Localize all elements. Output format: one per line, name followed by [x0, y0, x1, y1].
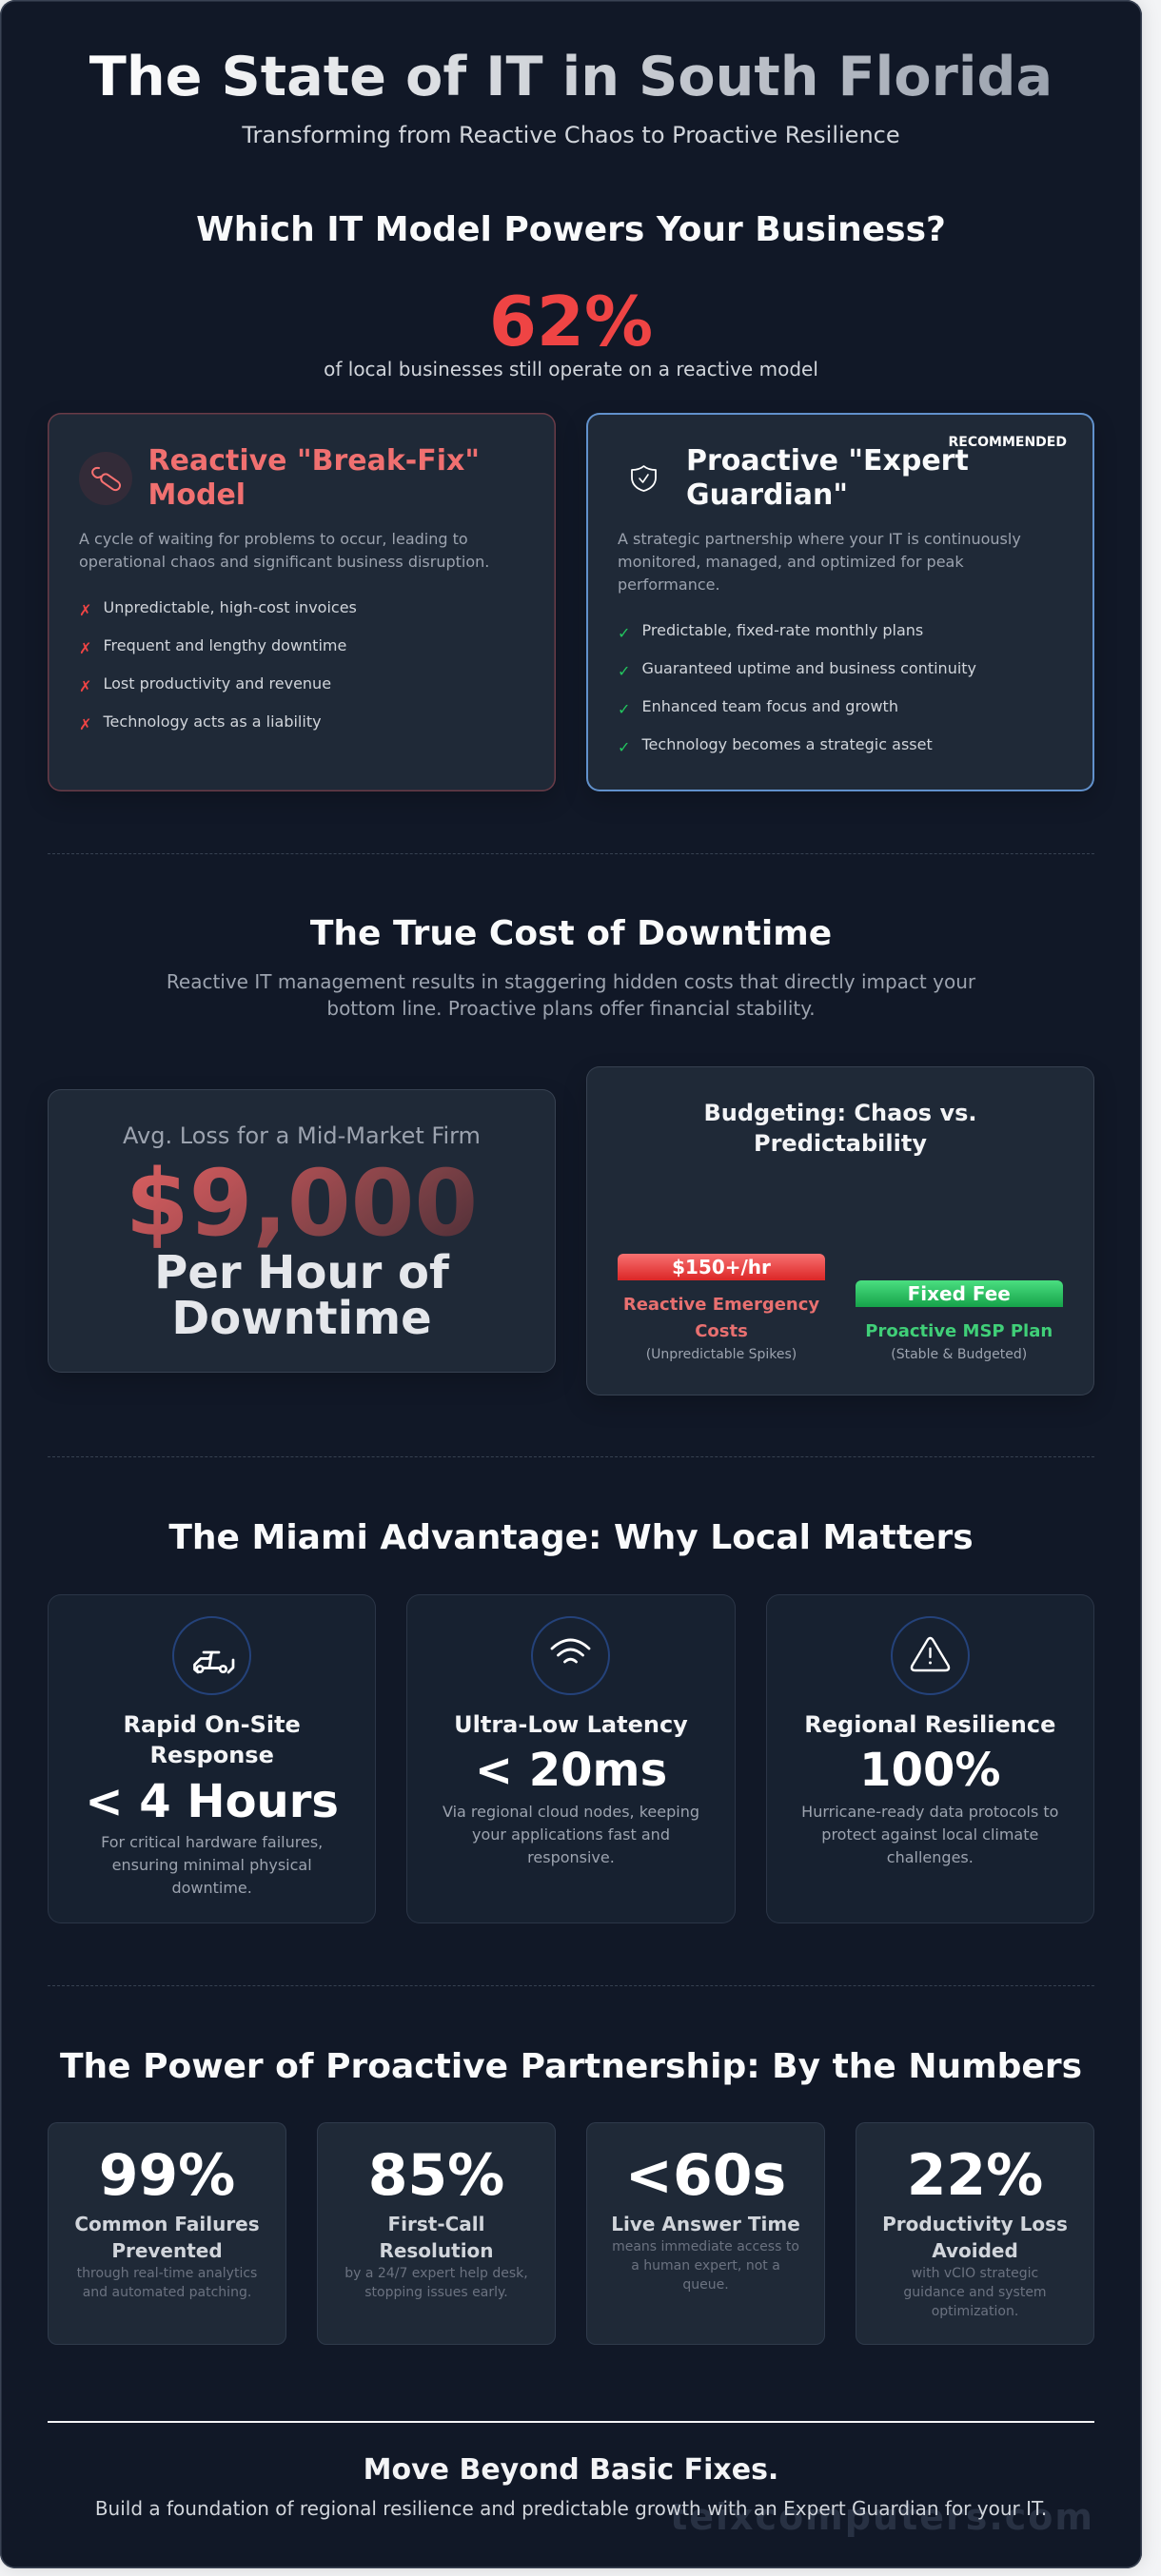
description: hurricane-ready: [801, 1802, 1058, 1866]
text: per hour of downtime: Per Hour of: [154, 1246, 449, 1299]
icon ring: scooter: [172, 1616, 251, 1695]
list: reactive drawbacks: ✗: [79, 639, 91, 657]
label: reactive emergency costs: Reactive Emergency: [623, 1295, 819, 1315]
panel: loss per hour: [48, 1089, 556, 1373]
label: failures prevented: Common Failures: [74, 2213, 260, 2235]
list: proactive benefits: Predictable, fixed-rate monthly plans: [641, 620, 923, 639]
panel: stat 99 percent: [48, 2122, 286, 2345]
description: proactive: A strategic partnership where your IT is continuously: [618, 530, 1021, 548]
heading: budgeting: [703, 1100, 976, 1157]
heading: budgeting: Predictability: [754, 1130, 927, 1157]
list: reactive drawbacks: Unpredictable, high-cost invoices: [103, 598, 357, 616]
heading: reactive: [148, 444, 480, 512]
heading: rapid on-site response: [124, 1711, 301, 1768]
label: first-call resolution: First-Call: [387, 2213, 485, 2235]
note: stable and budgeted: (Stable & Budgeted): [891, 1347, 1027, 1362]
label: failures prevented: Prevented: [111, 2239, 223, 2262]
list: proactive benefits: [618, 620, 976, 755]
note: vCIO guidance: optimization.: [932, 2304, 1018, 2319]
text: cost intro: bottom line. Proactive plans offer financial stability.: [326, 997, 816, 1020]
description: proactive: performance.: [618, 576, 720, 594]
list: reactive drawbacks: Frequent and lengthy downtime: [103, 636, 346, 654]
description: regional cloud nodes: your applications fast and: [472, 1825, 670, 1844]
description: hardware failures: For critical hardware failures,: [101, 1833, 323, 1851]
icon: wrench: [79, 452, 132, 505]
note: help desk: by a 24/7 expert help desk,: [344, 2266, 528, 2281]
description: regional cloud nodes: [443, 1802, 699, 1866]
list: proactive benefits: Guaranteed uptime and business continuity: [641, 658, 976, 677]
heading: reactive: Reactive "Break-Fix": [148, 444, 480, 478]
stat: 62 percent: 62%: [489, 282, 653, 361]
note: human expert: queue.: [682, 2277, 729, 2293]
note: help desk: [344, 2266, 528, 2300]
list: proactive benefits: ✓: [618, 700, 630, 717]
note: help desk: stopping issues early.: [364, 2285, 508, 2300]
subtitle: Transforming from Reactive Chaos to Proactive Resilience: [242, 122, 900, 148]
text: per hour of downtime: Downtime: [171, 1292, 432, 1345]
heading: proactive: Guardian": [686, 478, 848, 512]
panel: budgeting comparison: [586, 1066, 1094, 1395]
title: The State of IT in South Florida: [89, 45, 1053, 108]
list: reactive drawbacks: [79, 598, 357, 733]
description: hardware failures: downtime.: [171, 1879, 252, 1897]
bar: fixed fee: [855, 1280, 1063, 1307]
label: productivity loss: Avoided: [932, 2239, 1018, 2262]
panel: proactive model: [586, 413, 1094, 791]
note: vCIO guidance: guidance and system: [903, 2285, 1047, 2300]
list: proactive benefits: Technology becomes a strategic asset: [641, 734, 933, 753]
description: hardware failures: ensuring minimal physical: [112, 1856, 312, 1874]
list: reactive drawbacks: Lost productivity and revenue: [103, 674, 331, 693]
list: reactive drawbacks: ✗: [79, 677, 91, 695]
description: proactive: monitored, managed, and optimized for peak: [618, 553, 964, 571]
description: reactive: A cycle of waiting for problems to occur, leading to: [79, 530, 468, 548]
text: per hour of downtime: [154, 1246, 449, 1345]
heading: which IT model: Which IT Model Powers Your Business?: [196, 210, 946, 249]
description: hardware failures: [101, 1833, 323, 1897]
list: reactive drawbacks: ✗: [79, 715, 91, 733]
heading: reactive: Model: [148, 478, 246, 512]
panel: regional resilience: [766, 1594, 1094, 1923]
heading: proactive: [686, 444, 969, 512]
heading: regional resilience: Regional Resilience: [804, 1711, 1055, 1738]
heading: budgeting: Budgeting: Chaos vs.: [703, 1100, 976, 1126]
description: hurricane-ready: protect against local climate: [821, 1825, 1038, 1844]
label: reactive emergency costs: Costs: [695, 1321, 748, 1341]
label: average loss: Avg. Loss for a Mid-Market Firm: [123, 1122, 481, 1149]
heading: rapid on-site response: Response: [149, 1742, 274, 1768]
label: live answer time: Live Answer Time: [611, 2213, 800, 2235]
heading: by the numbers: The Power of Proactive Partnership: By the Numbers: [60, 2047, 1082, 2086]
list: proactive benefits: ✓: [618, 738, 630, 755]
value: under 60 seconds: <60s: [625, 2142, 786, 2209]
note: unpredictable spikes: (Unpredictable Spikes): [646, 1347, 797, 1362]
list: proactive benefits: Enhanced team focus and growth: [641, 696, 898, 715]
value: 85 percent: 85%: [368, 2142, 504, 2209]
value: 99 percent: 99%: [99, 2142, 235, 2209]
value: under 4 hours: < 4 Hours: [85, 1775, 339, 1828]
footer text: Build a foundation of regional resilience and predictable growth with an Expert Guardian for your IT.: [95, 2497, 1047, 2520]
description: reactive: operational chaos and significant business disruption.: [79, 553, 489, 571]
icon ring: wifi: [531, 1616, 610, 1695]
heading: rapid on-site response: Rapid On-Site: [124, 1711, 301, 1738]
panel: stat 60 seconds: [586, 2122, 825, 2345]
icon: wifi: [550, 1638, 590, 1663]
stat caption: of local businesses still operate on a reactive model: [324, 358, 818, 381]
label: first-call resolution: [379, 2213, 494, 2262]
heading: miami advantage: The Miami Advantage: Why Local Matters: [168, 1518, 974, 1557]
description: proactive: [618, 530, 1021, 594]
heading: true cost: The True Cost of Downtime: [310, 914, 832, 953]
text: cost intro: Reactive IT management results in staggering hidden costs that directly impact your: [167, 970, 975, 993]
note: vCIO guidance: [903, 2266, 1047, 2319]
note: analytics: and automated patching.: [83, 2285, 251, 2300]
note: vCIO guidance: with vCIO strategic: [912, 2266, 1038, 2281]
label: productivity loss: [882, 2213, 1068, 2262]
badge: recommended: RECOMMENDED: [948, 435, 1067, 450]
icon: alert triangle: [910, 1636, 950, 1672]
value: 9000 dollars: $9,000: [126, 1150, 478, 1257]
text: cost intro: [167, 970, 976, 1020]
label: first-call resolution: Resolution: [379, 2239, 494, 2262]
description: regional cloud nodes: Via regional cloud nodes, keeping: [443, 1802, 699, 1821]
value: 22 percent: 22%: [907, 2142, 1043, 2209]
value: 100 percent: 100%: [859, 1744, 1000, 1797]
bar: reactive cost: [618, 1254, 825, 1280]
icon: shield: [631, 465, 657, 492]
icon: scooter: [193, 1651, 234, 1674]
description: reactive: [79, 530, 489, 571]
panel: stat 22 percent: [856, 2122, 1094, 2345]
description: hurricane-ready: challenges.: [887, 1847, 974, 1866]
panel: low latency: [406, 1594, 736, 1923]
note: human expert: means immediate access to: [612, 2239, 799, 2254]
bar: fixed fee: Fixed Fee: [908, 1282, 1011, 1305]
footer heading: Move Beyond Basic Fixes.: [364, 2453, 778, 2487]
list: proactive benefits: ✓: [618, 624, 630, 641]
panel: reactive model: [48, 413, 556, 791]
label: proactive plan: Proactive MSP Plan: [865, 1321, 1053, 1341]
bar: reactive cost: $150+/hr: [672, 1256, 771, 1278]
icon ring: alert: [891, 1616, 970, 1695]
list: reactive drawbacks: ✗: [79, 601, 91, 619]
note: human expert: [612, 2239, 799, 2293]
description: regional cloud nodes: responsive.: [527, 1847, 615, 1866]
note: analytics: through real-time analytics: [77, 2266, 257, 2281]
description: hurricane-ready: Hurricane-ready data protocols to: [801, 1802, 1058, 1821]
label: failures prevented: [74, 2213, 260, 2262]
note: analytics: [77, 2266, 257, 2300]
panel: rapid response: [48, 1594, 376, 1923]
list: proactive benefits: ✓: [618, 662, 630, 679]
label: productivity loss: Productivity Loss: [882, 2213, 1068, 2235]
heading: proactive: Proactive "Expert: [686, 444, 969, 478]
value: under 20ms: < 20ms: [475, 1744, 667, 1797]
panel: stat 85 percent: [317, 2122, 556, 2345]
label: reactive emergency costs: [623, 1295, 819, 1341]
watermark: teixcomputers.com: [670, 2496, 1094, 2538]
note: human expert: a human expert, not a: [631, 2258, 780, 2274]
list: reactive drawbacks: Technology acts as a liability: [103, 712, 322, 731]
heading: ultra-low latency: Ultra-Low Latency: [454, 1711, 688, 1738]
